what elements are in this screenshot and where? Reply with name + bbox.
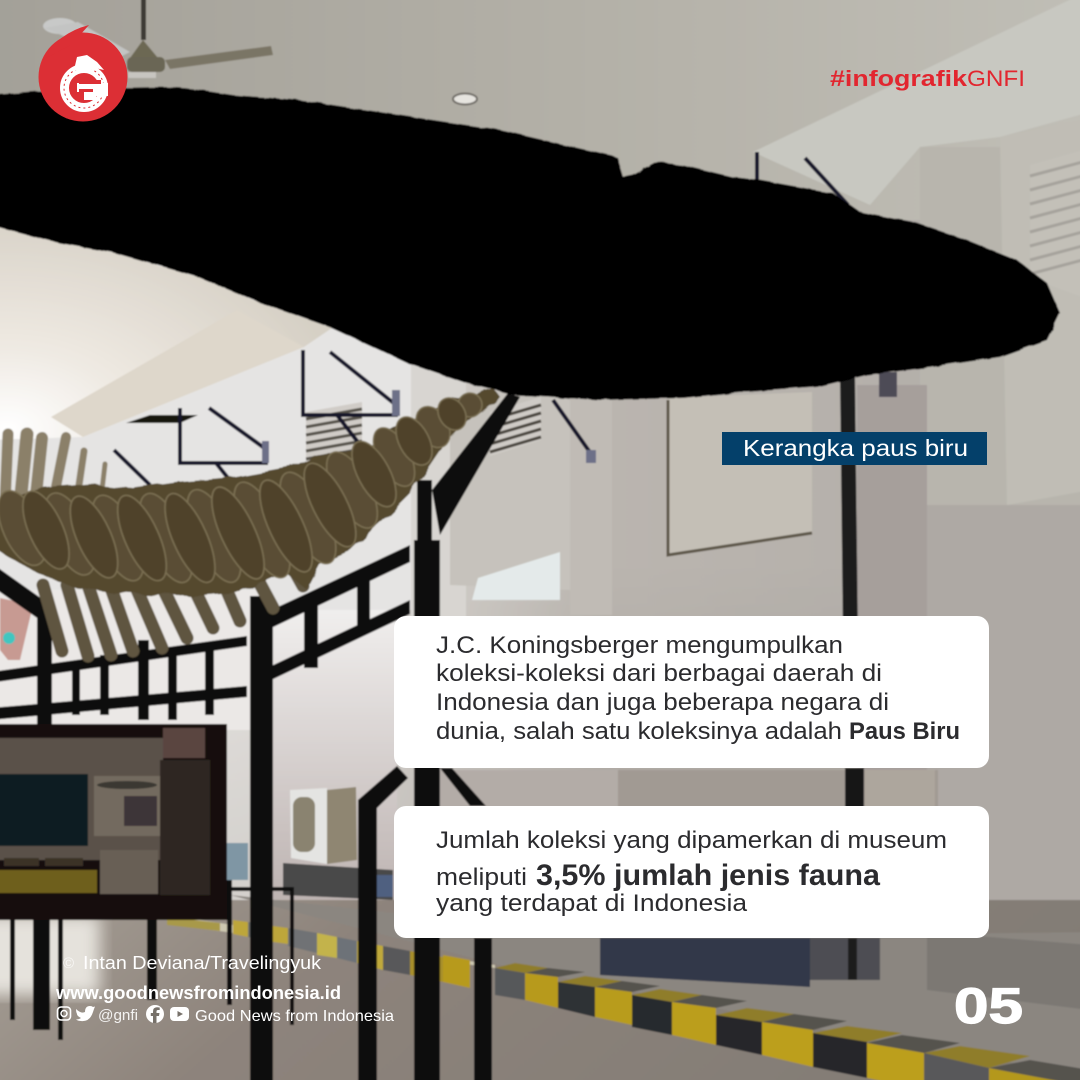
navy panel — [600, 938, 810, 987]
information board — [0, 724, 227, 920]
ceiling — [0, 0, 1080, 290]
text card 1: koleksi-koleksi dari berbagai daerah di — [436, 660, 882, 687]
wall windows — [450, 392, 812, 615]
footer website and social media — [55, 982, 394, 1025]
text card 2: meliputi — [436, 864, 527, 891]
caption label: Kerangka paus biru — [743, 435, 968, 461]
spine vertebrae — [0, 388, 487, 590]
logo emblem — [64, 55, 108, 108]
icon: facebook — [146, 1005, 164, 1023]
ceiling lamp — [453, 94, 477, 104]
air conditioner — [290, 787, 357, 864]
left object behind skeleton — [0, 598, 33, 660]
page number: 05 — [954, 978, 1023, 1034]
spine body — [0, 388, 500, 596]
icon: instagram — [58, 1007, 70, 1020]
icon: twitter — [76, 1006, 95, 1021]
caption label — [722, 432, 987, 465]
hashtag — [830, 66, 1025, 91]
upward ribs — [5, 434, 105, 505]
right wall panels — [857, 118, 1080, 947]
footer website and social media: @gnfi — [98, 1007, 138, 1024]
upper right ceiling beam — [753, 0, 1080, 205]
dark beam at skeleton — [0, 500, 40, 507]
whale skeleton — [0, 388, 500, 656]
lower wall — [272, 610, 397, 900]
text card 2 — [394, 806, 989, 938]
ceiling beam — [51, 310, 304, 437]
blue window behind post — [227, 843, 248, 880]
photo credit: © — [63, 955, 74, 972]
text card 1 — [394, 616, 989, 768]
ribs hanging down — [43, 550, 303, 656]
ceiling fan — [43, 0, 273, 78]
left diagonal support — [0, 562, 52, 620]
logo — [38, 25, 128, 122]
text card 2: Jumlah koleksi yang dipamerkan di museum — [436, 827, 947, 854]
floor — [0, 900, 1080, 1080]
hashtag: GNFI — [967, 66, 1025, 91]
text card 2: 3,5% jumlah jenis fauna — [536, 859, 880, 892]
light floor at left — [0, 915, 100, 995]
yellow and dark floor curb — [167, 915, 1080, 1080]
teal object behind skeleton — [3, 632, 15, 644]
steel frame ladder — [0, 545, 410, 1040]
text card 1: J.C. Koningsberger mengumpulkan — [436, 632, 843, 659]
left white wall — [0, 328, 411, 610]
whale silhouette on the ceiling — [0, 87, 1060, 400]
footer website and social media: Good News from Indonesia — [195, 1008, 394, 1025]
hashtag: #infografik — [830, 66, 968, 91]
low bench — [283, 863, 393, 900]
bracket plates — [262, 372, 897, 463]
air vents — [306, 397, 541, 462]
text card 1: dunia, salah satu koleksinya adalah — [436, 718, 842, 745]
photo credit: Intan Deviana/Travelingyuk — [83, 952, 322, 973]
floor behind curb — [230, 895, 1080, 1075]
ceiling slot — [126, 415, 198, 423]
pilaster — [411, 360, 466, 620]
text card 1: Paus Biru — [849, 718, 960, 745]
icon: youtube — [170, 1007, 189, 1021]
main posts — [250, 375, 864, 1080]
footer website and social media: www.goodnewsfromindonesia.id — [55, 982, 341, 1003]
lit ceiling beneath whale — [0, 215, 332, 440]
wall — [0, 220, 1080, 950]
text card 2: yang terdapat di Indonesia — [436, 890, 748, 917]
curb front faces — [495, 968, 525, 1000]
curb top faces — [495, 963, 548, 973]
wall brackets — [114, 152, 848, 485]
text card 1: Indonesia dan juga beberapa negara di — [436, 689, 889, 716]
